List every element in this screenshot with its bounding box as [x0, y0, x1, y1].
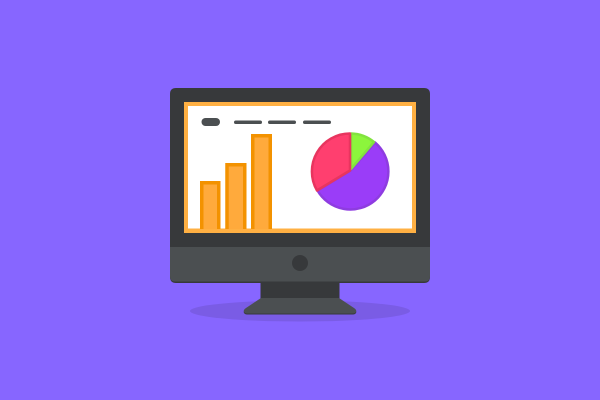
screen frame	[184, 102, 416, 233]
bar 1	[202, 183, 219, 229]
ground shadow	[190, 300, 410, 322]
monitor chin	[170, 247, 430, 282]
header placeholder	[202, 118, 331, 126]
pie chart	[312, 133, 388, 209]
monitor body	[170, 88, 430, 283]
bar chart	[202, 136, 270, 229]
screen	[184, 102, 416, 233]
stand base edge	[244, 299, 356, 314]
stand base	[244, 298, 356, 314]
screen background	[188, 106, 412, 228]
bar 2	[227, 165, 245, 229]
monitor stand	[244, 282, 356, 314]
purple slice	[318, 142, 388, 209]
power button	[292, 255, 308, 271]
green slice	[351, 134, 374, 169]
red slice	[312, 133, 350, 190]
stand neck	[260, 282, 340, 299]
bar 3	[253, 136, 270, 229]
monitor bezel	[170, 88, 430, 247]
monitor lower edge	[170, 260, 430, 283]
